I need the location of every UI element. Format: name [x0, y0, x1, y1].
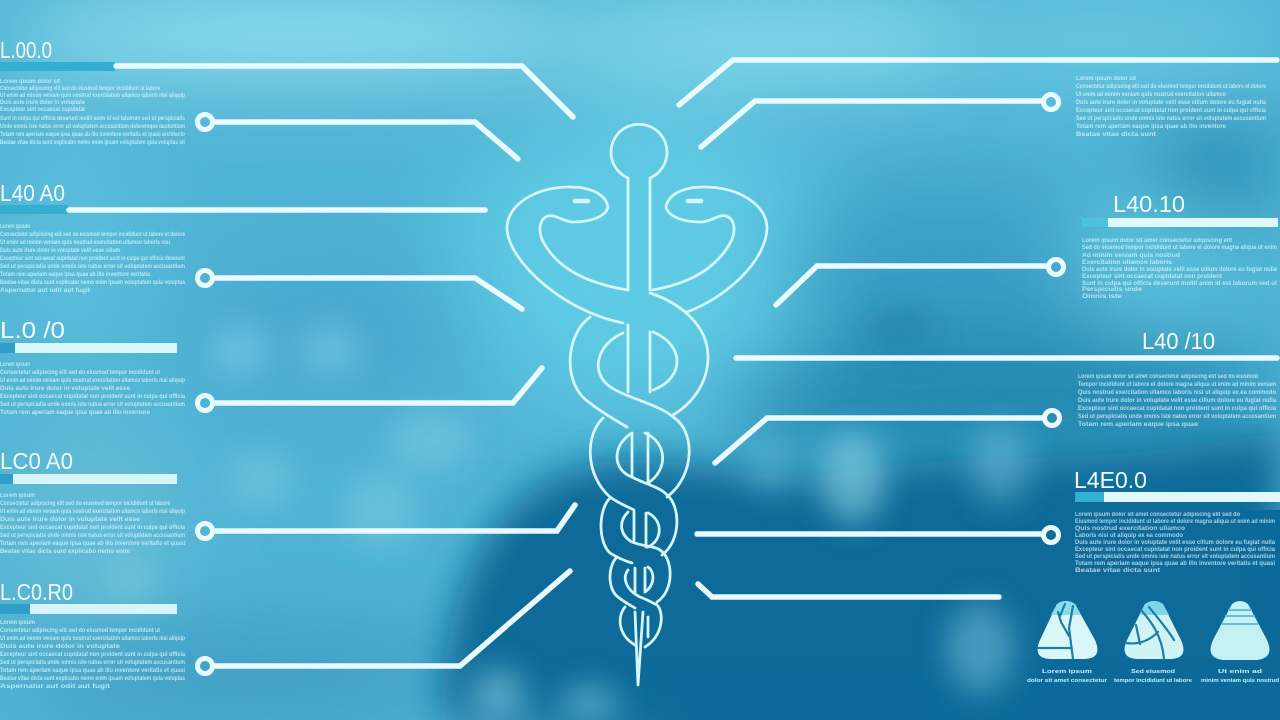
- paragraph: Ut enim ad minim veniam quis nostrud exercitation ullamco laboris nisi aliquip: [0, 93, 185, 99]
- paragraph: Sunt in culpa qui officia deserunt mollit anim id est laborum sed ut perspiciatis: [0, 116, 186, 122]
- heading: L.C0.R0: [0, 579, 73, 605]
- paragraph: [1075, 512, 1276, 574]
- paragraph: Sed ut perspiciatis unde omnis iste natus error sit voluptatem accusantium: [0, 533, 185, 539]
- right connector 8: [697, 528, 1058, 542]
- paragraph: Perspiciatis unde: [1082, 287, 1143, 293]
- progress bar: [13, 474, 177, 484]
- right paragraph 1: Totam rem aperiam eaque ipsa quae ab illo inventore: [1076, 124, 1227, 130]
- cone icons row: [1027, 601, 1279, 684]
- left connector 10: [198, 571, 570, 674]
- cone captions: [1027, 669, 1279, 684]
- paragraph: Lorem ipsum: [0, 620, 35, 626]
- right paragraph 1: Duis aute irure dolor in voluptate velit esse cillum dolore eu fugiat nulla: [1076, 100, 1267, 106]
- right serpent eye: [688, 199, 701, 203]
- paragraph: Sunt in culpa qui officia deserunt mollit anim id est laborum sed ut: [1082, 281, 1277, 287]
- paragraph: Totam rem aperiam eaque ipsa quae ab illo inventore veritatis et quasi: [0, 668, 185, 674]
- paragraph: Duis aute irure dolor in voluptate velit esse cillum dolore eu fugiat nulla: [1078, 398, 1277, 404]
- accent bar: [1082, 218, 1108, 227]
- paragraph: Totam rem aperiam eaque ipsa quae ab illo inventore: [0, 410, 151, 416]
- right connector 6: [715, 410, 1060, 463]
- left connector 2: [198, 114, 518, 159]
- paragraph: Duis aute irure dolor in voluptate velit esse cillum dolore eu fugiat nulla: [1075, 540, 1276, 546]
- left connector 4: [198, 270, 522, 309]
- paragraph: Omnis iste: [1082, 294, 1123, 300]
- left serpent eye: [575, 199, 588, 203]
- left serpent head and body: [507, 187, 628, 323]
- right serpent head and body: [652, 187, 767, 312]
- right paragraph 1: Lorem ipsum dolor sit: [1076, 76, 1136, 82]
- paragraph: Lorem ipsum dolor sit: [0, 79, 60, 85]
- paragraph: Duis aute irure dolor in voluptate velit esse: [0, 386, 131, 392]
- right paragraph 1: Excepteur sint occaecat cupidatat non proident sunt in culpa qui officia: [1076, 108, 1267, 114]
- caduceus icon: [507, 124, 767, 685]
- paragraph: Duis aute irure dolor in voluptate velit esse cillum dolore eu fugiat nulla: [1082, 267, 1278, 273]
- heading: L.0 /0: [0, 317, 65, 343]
- dark lower edge fill: [440, 660, 1280, 720]
- paragraph: Totam rem aperiam eaque ipsa quae ab illo inventore veritatis et quasi: [0, 541, 185, 547]
- heading: L.00.0: [0, 37, 52, 63]
- right connector 4: [776, 260, 1064, 305]
- right connector 1: [679, 60, 1277, 105]
- paragraph: Duis aute irure dolor in voluptate: [0, 644, 121, 650]
- progress bar: [1108, 218, 1278, 227]
- paragraph: Aspernatur aut odit aut fugit: [0, 288, 90, 294]
- accent bar: [0, 205, 68, 214]
- paragraph: [0, 362, 186, 416]
- right paragraph 1: Ut enim ad minim veniam quis nostrud exercitation ullamco: [1076, 92, 1226, 98]
- paragraph: Beatae vitae dicta sunt: [1075, 568, 1160, 574]
- progress bar: [30, 604, 177, 614]
- connector: [116, 66, 573, 117]
- left group 1: [0, 37, 573, 146]
- paragraph: Sed ut perspiciatis unde omnis iste natus error sit voluptatem accusantium: [0, 402, 185, 408]
- left group 4: [0, 448, 186, 555]
- paragraph: Ut enim ad minim veniam quis nostrud exercitation ullamco laboris nisi aliquip: [0, 509, 185, 515]
- paragraph: Excepteur sint occaecat cupidatat non proident sunt in culpa qui officia: [1075, 547, 1276, 553]
- paragraph: Excepteur sint occaecat cupidatat non proident sunt in culpa qui officia deserunt: [0, 256, 185, 262]
- paragraph: Consectetur adipiscing elit sed do eiusmod tempor incididunt ut: [0, 370, 160, 376]
- left group 5: [0, 579, 186, 690]
- paragraph: Laboris nisi ut aliquip ex ea commodo: [1075, 533, 1183, 539]
- paragraph: Duis aute irure dolor in voluptate: [0, 100, 86, 106]
- paragraph: Duis aute irure dolor in voluptate velit esse cillum: [0, 248, 120, 254]
- paragraph: [1078, 374, 1277, 428]
- paragraph: Consectetur adipiscing elit sed do eiusmod tempor incididunt ut labore: [0, 86, 161, 92]
- paragraph: Excepteur sint occaecat cupidatat non proident sunt in culpa qui officia: [0, 394, 186, 400]
- staff and ball: [611, 124, 667, 685]
- connector: [736, 355, 1277, 361]
- paragraph: Duis aute irure dolor in voluptate velit esse: [0, 517, 141, 523]
- paragraph: Consectetur adipiscing elit sed do eiusmod tempor incididunt ut: [0, 628, 160, 634]
- progress bar: [15, 343, 177, 353]
- paragraph: Quis nostrud exercitation ullamco: [1075, 526, 1185, 532]
- cone captions: Ut enim ad: [1218, 669, 1262, 675]
- paragraph: Aspernatur aut odit aut fugit: [0, 684, 110, 690]
- right paragraph 1: Beatae vitae dicta sunt: [1076, 132, 1156, 138]
- left connector 6: [198, 368, 542, 410]
- paragraph: Excepteur sint occaecat cupidatat non proident: [1082, 274, 1222, 280]
- paragraph: Lorem ipsum: [0, 362, 30, 368]
- right paragraph 1: [1076, 76, 1267, 138]
- paragraph: Totam rem aperiam eaque ipsa quae ab illo inventore veritatis: [0, 272, 151, 278]
- paragraph: Beatae vitae dicta sunt explicabo nemo enim ipsam voluptatem quia voluptas: [0, 676, 186, 682]
- right connector 2: [701, 94, 1058, 147]
- paragraph: [0, 79, 186, 146]
- cone captions: dolor sit amet consectetur: [1027, 678, 1107, 684]
- paragraph: Sed ut perspiciatis unde omnis iste natus error sit voluptatem accusantium: [0, 660, 185, 666]
- paragraph: Excepteur sint occaecat cupidatat: [0, 107, 85, 113]
- first coil: [570, 293, 708, 497]
- paragraph: Excepteur sint occaecat cupidatat non proident sunt in culpa qui officia: [0, 652, 186, 658]
- paragraph: Consectetur adipiscing elit sed do eiusmod tempor incididunt ut labore: [0, 501, 171, 507]
- paragraph: Quis nostrud exercitation ullamco laboris nisi ut aliquip ex ea commodo: [1078, 390, 1276, 396]
- accent bar: [0, 62, 115, 71]
- heading: L40.10: [1113, 191, 1185, 217]
- paragraph: Unde omnis iste natus error sit voluptatem accusantium doloremque laudantium: [0, 124, 185, 130]
- paragraph: Beatae vitae dicta sunt explicabo nemo enim ipsam voluptatem quia voluptas sit: [0, 140, 185, 146]
- heading: L40 /10: [1142, 328, 1215, 354]
- paragraph: Totam rem aperiam eaque ipsa quae ab illo inventore veritatis et quasi architecto: [0, 132, 185, 138]
- right group 5: [736, 328, 1277, 428]
- paragraph: Lorem ipsum: [0, 493, 35, 499]
- dark right edge fill: [1240, 510, 1280, 720]
- icon: striped cone 3: [1211, 601, 1269, 660]
- paragraph: [0, 224, 186, 294]
- paragraph: [0, 493, 186, 555]
- paragraph: Beatae vitae dicta sunt explicabo nemo enim: [0, 549, 130, 555]
- paragraph: [0, 620, 186, 690]
- icon: veined cone 2: [1125, 601, 1183, 659]
- third coil: [601, 498, 670, 602]
- heading: L4E0.0: [1074, 467, 1147, 493]
- cone captions: tempor incididunt ut labore: [1114, 678, 1192, 684]
- paragraph: Lorem ipsum dolor sit amet consectetur adipiscing elit: [1082, 238, 1232, 244]
- paragraph: Ut enim ad minim veniam quis nostrud exercitation ullamco laboris nisi aliquip: [0, 636, 185, 642]
- paragraph: Ut enim ad minim veniam quis nostrud exercitation ullamco laboris nisi: [0, 240, 170, 246]
- connector: [69, 207, 485, 213]
- paragraph: Ut enim ad minim veniam quis nostrud exercitation ullamco laboris nisi aliquip: [0, 378, 185, 384]
- paragraph: Lorem ipsum dolor sit amet consectetur adipiscing elit sed do eiusmod: [1078, 374, 1258, 380]
- left group 2: [0, 180, 485, 294]
- left connector 8: [198, 505, 575, 538]
- cone captions: Sed eiusmod: [1131, 669, 1175, 675]
- paragraph: Exercitation ullamco laboris: [1082, 260, 1173, 266]
- accent bar: [0, 343, 15, 353]
- icon: veined cone 1: [1038, 601, 1097, 659]
- right group 3: [1082, 191, 1278, 300]
- paragraph: Totam rem aperiam eaque ipsa quae: [1078, 422, 1199, 428]
- paragraph: Lorem ipsum: [0, 224, 30, 230]
- accent bar: [0, 474, 13, 484]
- paragraph: Excepteur sint occaecat cupidatat non proident sunt in culpa qui officia: [1078, 406, 1277, 412]
- fourth coil: [610, 557, 661, 647]
- right group 7: [1074, 467, 1280, 574]
- left group 3: [0, 317, 186, 416]
- paragraph: Sed ut perspiciatis unde omnis iste natus error sit voluptatem accusantium: [0, 264, 185, 270]
- accent bar: [0, 604, 30, 614]
- heading: L40 A0: [0, 180, 65, 206]
- heading: LC0 A0: [0, 448, 73, 474]
- paragraph: Ad minim veniam quis nostrud: [1082, 253, 1180, 259]
- paragraph: Totam rem aperiam eaque ipsa quae ab illo inventore veritatis et quasi: [1075, 561, 1275, 567]
- paragraph: Excepteur sint occaecat cupidatat non proident sunt in culpa qui officia: [0, 525, 186, 531]
- paragraph: Lorem ipsum dolor sit amet consectetur adipiscing elit sed do: [1075, 512, 1240, 518]
- paragraph: [1082, 238, 1278, 300]
- progress bar: [1104, 492, 1280, 502]
- paragraph: Beatae vitae dicta sunt explicabo nemo enim ipsam voluptatem quia voluptas: [0, 280, 186, 286]
- right connector 9: [698, 584, 999, 597]
- dark lower region: [440, 430, 1280, 720]
- lower coil: [620, 607, 648, 645]
- cone captions: Lorem ipsum: [1042, 669, 1093, 675]
- second coil: [590, 418, 677, 555]
- accent bar: [1075, 492, 1104, 502]
- paragraph: Consectetur adipiscing elit sed do eiusmod tempor incididunt ut labore et dolore: [0, 232, 186, 238]
- cone captions: minim veniam quis nostrud: [1201, 678, 1279, 684]
